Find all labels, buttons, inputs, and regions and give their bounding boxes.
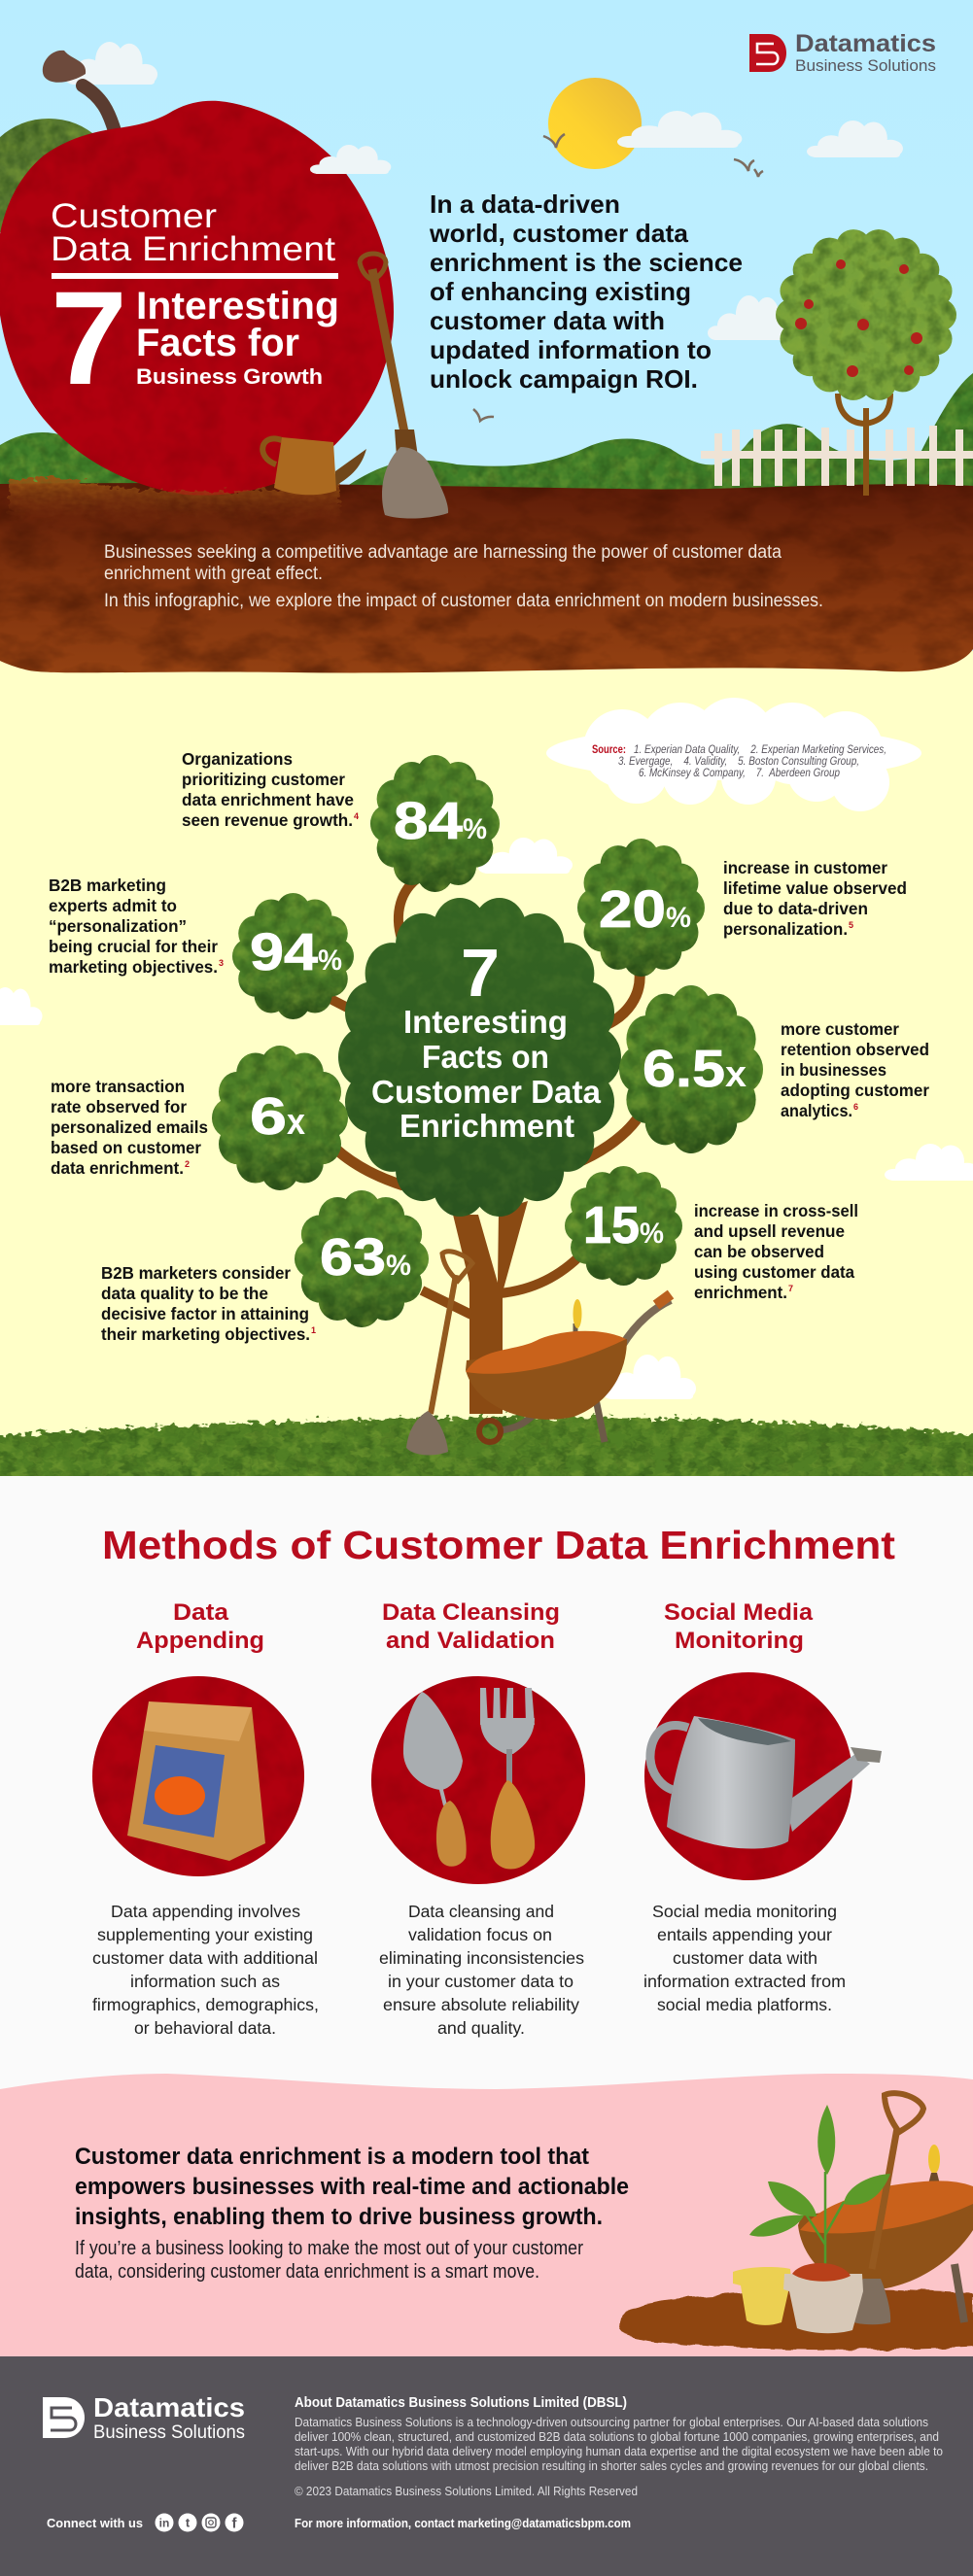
method description: social media platforms. [657, 1995, 832, 2014]
stat: 6x: 6 [250, 1087, 287, 1146]
method title: Appending [136, 1628, 264, 1654]
source citations [592, 744, 886, 779]
fact: cross-sell: increase in cross-sell [694, 1201, 858, 1220]
title: Interesting [136, 285, 339, 327]
stat: 84 percent: % [463, 813, 487, 845]
fact: transaction rate: based on customer [51, 1138, 201, 1157]
method description: supplementing your existing [97, 1925, 313, 1944]
red circle [371, 1676, 585, 1884]
cloud: behind wheelbarrow [603, 1355, 696, 1399]
method description [643, 1902, 846, 2014]
white pot [783, 2263, 863, 2333]
illustration: garden still life [618, 2093, 973, 2350]
logo: top right: Business Solutions [795, 56, 936, 75]
red circle [92, 1676, 304, 1876]
fact: personalization: experts admit to [49, 896, 177, 915]
footer logo: Datamatics [93, 2392, 245, 2422]
cream facts section background [0, 651, 973, 1477]
fact: cross-sell [694, 1201, 858, 1302]
stat: 94 percent: 94 [250, 923, 318, 981]
stat: 6x: x [287, 1102, 305, 1143]
fact: personalization [49, 876, 224, 977]
fact: cross-sell: enrichment. [694, 1283, 787, 1302]
method description: entails appending your [657, 1925, 832, 1944]
conclusion statement: Customer data enrichment is a modern tool that [75, 2144, 589, 2170]
fact: transaction rate: 2 [185, 1159, 190, 1169]
tree trunk and branches [329, 879, 640, 1414]
pink wave background [0, 2074, 973, 2357]
soil patch [618, 2288, 973, 2350]
method description: or behavioral data. [134, 2018, 276, 2038]
method description [379, 1902, 584, 2038]
intro statement: updated information to [430, 335, 712, 364]
method description: Data cleansing and [408, 1902, 554, 1921]
central heading: Facts on [422, 1039, 549, 1075]
fact: lifetime value: 5 [849, 920, 853, 930]
conclusion call to action: data, considering customer data enrichment is a smart move. [75, 2261, 539, 2283]
red circle [644, 1672, 852, 1880]
stat: 6.5x: 6.5 [643, 1040, 725, 1098]
icon: watering can [650, 1716, 882, 1849]
fact: retention: in businesses [781, 1060, 886, 1080]
soil intro text: enrichment with great effect. [104, 564, 323, 584]
method description [92, 1902, 319, 2038]
conclusion statement: empowers businesses with real-time and actionable [75, 2174, 629, 2200]
fact: data quality: data quality to be the [101, 1284, 268, 1303]
fact: data quality: 1 [311, 1325, 316, 1335]
fact: data quality [101, 1263, 316, 1344]
intro statement: unlock campaign ROI. [430, 364, 698, 394]
fact: revenue growth: Organizations [182, 749, 293, 769]
fact: revenue growth: prioritizing customer [182, 770, 345, 789]
soil intro text: In this infographic, we explore the impact of customer data enrichment on modern businesses. [104, 591, 823, 611]
fact: retention: more customer [781, 1019, 899, 1039]
fact: personalization: B2B marketing [49, 876, 166, 895]
fact: lifetime value: personalization. [723, 919, 848, 939]
method description: customer data with additional [92, 1948, 318, 1968]
method: data cleansing [371, 1599, 585, 2038]
cloud: right [807, 120, 903, 157]
stat: 63 percent [295, 1190, 429, 1327]
cloud: beside 84 percent [478, 838, 573, 874]
method description: firmographics, demographics, [92, 1995, 319, 2014]
soil ground [0, 483, 973, 672]
fact: cross-sell: can be observed [694, 1242, 824, 1261]
about heading: About Datamatics Business Solutions Limited (DBSL) [295, 2394, 627, 2411]
stat: 20 percent [577, 839, 705, 977]
cloud: right edge [885, 1144, 973, 1181]
method title: Monitoring [675, 1628, 804, 1654]
central heading [371, 935, 602, 1144]
cloud: top left [65, 42, 157, 85]
fact: personalization: being crucial for their [49, 937, 218, 956]
about text: Datamatics Business Solutions is a technology-driven outsourcing partner for global enterprises. Our AI-based data solutions [295, 2415, 928, 2429]
about text: deliver B2B data solutions with utmost precision resulting in shorter sales cycles and growing revenues for our global clients. [295, 2458, 928, 2473]
title [51, 197, 339, 413]
title: Customer [51, 197, 217, 235]
stat: 15 percent [565, 1166, 682, 1286]
stat: 20 percent: 20 [599, 880, 666, 939]
intro statement: customer data with [430, 306, 665, 335]
panel: conclusion [0, 2074, 973, 2357]
stat: 6x [212, 1046, 348, 1190]
fact: lifetime value [723, 858, 907, 939]
fact: personalization: “personalization” [49, 916, 187, 936]
barrow bowl [798, 2191, 973, 2289]
yellow pot [733, 2267, 791, 2325]
stat: 6.5x: x [725, 1054, 747, 1095]
icon: social links: in [159, 2517, 169, 2530]
fact: lifetime value: increase in customer [723, 858, 887, 877]
apple [0, 101, 394, 496]
fact: transaction rate: more transaction [51, 1077, 185, 1096]
fruit tree [776, 229, 956, 496]
stat: 6.5x [619, 985, 763, 1153]
grass [0, 1417, 973, 1496]
panel: hero scene [0, 42, 973, 672]
methods section background [0, 1476, 973, 2098]
fact: revenue growth: seen revenue growth. [182, 810, 353, 830]
method title [664, 1599, 814, 1654]
stat: 84 percent: 84 [394, 792, 463, 850]
method title: Data [173, 1599, 229, 1626]
method description: information extracted from [643, 1972, 846, 1991]
method description: validation focus on [408, 1925, 552, 1944]
icon: social links: f [231, 2515, 237, 2532]
barrow soil [800, 2181, 973, 2233]
title: Data Enrichment [51, 230, 335, 268]
method title: Social Media [664, 1599, 814, 1626]
barrow legs [955, 2264, 964, 2322]
method title [136, 1599, 264, 1654]
method description: ensure absolute reliability [383, 1995, 579, 2014]
title: Facts for [136, 322, 299, 364]
fact: lifetime value: lifetime value observed [723, 878, 907, 898]
fact: data quality: their marketing objectives. [101, 1324, 310, 1344]
stat: 63 percent: % [386, 1250, 411, 1282]
soil intro text [104, 542, 823, 611]
fact: cross-sell: 7 [788, 1284, 793, 1293]
wheelbarrow [466, 1294, 671, 1442]
about text [295, 2415, 943, 2473]
central heading: Interesting [403, 1004, 568, 1040]
stat: 15 percent: 15 [583, 1196, 640, 1254]
intro statement: of enhancing existing [430, 277, 691, 306]
icon: social links [156, 2513, 243, 2532]
birds [473, 134, 763, 421]
icon: seed bag [127, 1701, 265, 1861]
source citations: 1. Experian Data Quality, 2. Experian Marketing Services, [634, 744, 886, 756]
cloud: on apple [310, 145, 391, 174]
method: social media monitoring [643, 1599, 882, 2014]
source citations: Source: [592, 744, 626, 756]
conclusion call to action [75, 2238, 583, 2283]
fact: retention: analytics. [781, 1101, 852, 1120]
conclusion statement [75, 2144, 629, 2230]
stat: 63 percent: 63 [320, 1228, 386, 1287]
copyright: © 2023 Datamatics Business Solutions Limited. All Rights Reserved [295, 2484, 638, 2498]
icon: trowel and fork [403, 1688, 535, 1869]
title: 7 [51, 264, 127, 413]
method description: Social media monitoring [652, 1902, 837, 1921]
stat: 20 percent: % [666, 902, 691, 934]
sun [548, 78, 642, 169]
intro statement: world, customer data [429, 219, 689, 248]
background hills [0, 373, 973, 491]
method title: Data Cleansing [382, 1599, 560, 1626]
conclusion statement: insights, enabling them to drive business growth. [75, 2204, 603, 2230]
apple stem [43, 51, 115, 131]
method description: and quality. [437, 2018, 525, 2038]
plant [749, 2105, 890, 2264]
stat: 15 percent: % [640, 1218, 664, 1250]
central heading: Customer Data [371, 1074, 602, 1110]
method description: customer data with [673, 1948, 817, 1968]
intro statement: enrichment is the science [430, 248, 743, 277]
fact: data quality: decisive factor in attaining [101, 1304, 309, 1323]
source citations: 3. Evergage, 4. Validity, 5. Boston Consulting Group, [618, 756, 859, 768]
fact: revenue growth: 4 [354, 811, 359, 821]
method: data appending [92, 1599, 319, 2038]
central heading: 7 [461, 935, 500, 1011]
corn [927, 2145, 941, 2188]
method title: and Validation [386, 1628, 555, 1654]
fact: retention [781, 1019, 929, 1120]
cloud: behind tree [708, 295, 793, 340]
fact: transaction rate: data enrichment. [51, 1158, 184, 1178]
fact: cross-sell: and upsell revenue [694, 1221, 845, 1241]
fact: retention: 6 [853, 1102, 858, 1112]
conclusion call to action: If you’re a business looking to make the most out of your customer [75, 2238, 583, 2259]
logo: top right [749, 30, 936, 75]
method description: in your customer data to [388, 1972, 573, 1991]
central heading: Enrichment [400, 1108, 574, 1144]
source citations: 6. McKinsey & Company, 7. Aberdeen Group [639, 768, 841, 779]
stat: 94 percent: % [318, 945, 342, 977]
spade [853, 2093, 923, 2324]
cloud: sources [546, 698, 921, 811]
tree crown: central [338, 898, 621, 1217]
shovel [360, 254, 448, 519]
fact: personalization: marketing objectives. [49, 957, 218, 977]
intro statement [429, 189, 743, 394]
fact: transaction rate: rate observed for [51, 1097, 187, 1116]
icon: social links: t [186, 2515, 191, 2530]
method description: information such as [130, 1972, 280, 1991]
soil intro text: Businesses seeking a competitive advantage are harnessing the power of customer data [104, 542, 782, 563]
soil mound left [10, 477, 340, 520]
cloud: beside sun [617, 111, 742, 148]
watering can [262, 437, 366, 495]
intro statement: In a data-driven [430, 189, 620, 219]
fact: data quality: B2B marketers consider [101, 1263, 291, 1283]
fact: transaction rate: personalized emails [51, 1117, 208, 1137]
fact: retention: retention observed [781, 1040, 929, 1059]
section heading: methods: Methods of Customer Data Enrichment [102, 1523, 895, 1567]
fence [701, 426, 973, 486]
method description: Data appending involves [111, 1902, 300, 1921]
method description: eliminating inconsistencies [379, 1948, 584, 1968]
fact: personalization: 3 [219, 958, 224, 968]
footer logo: Business Solutions [93, 2422, 245, 2443]
stat: 84 percent [370, 755, 500, 892]
fact: cross-sell: using customer data [694, 1262, 854, 1282]
left hill behind apple [0, 119, 119, 251]
method title [382, 1599, 560, 1654]
stat: 94 percent [232, 893, 354, 1019]
sky background [0, 0, 973, 680]
garden shovel [406, 1252, 472, 1455]
footer logo [43, 2392, 245, 2443]
fact: lifetime value: due to data-driven [723, 899, 868, 918]
fact: transaction rate [51, 1077, 208, 1178]
footer background [0, 2356, 973, 2576]
fact: revenue growth: data enrichment have [182, 790, 354, 809]
logo: top right: Datamatics [795, 30, 936, 57]
fact: revenue growth [182, 749, 359, 830]
cloud: left edge [0, 987, 43, 1025]
contact line: For more information, contact marketing@datamaticsbpm.com [295, 2516, 631, 2530]
title: Business Growth [136, 364, 323, 389]
connect label: Connect with us [47, 2516, 143, 2530]
fact: retention: adopting customer [781, 1081, 929, 1100]
